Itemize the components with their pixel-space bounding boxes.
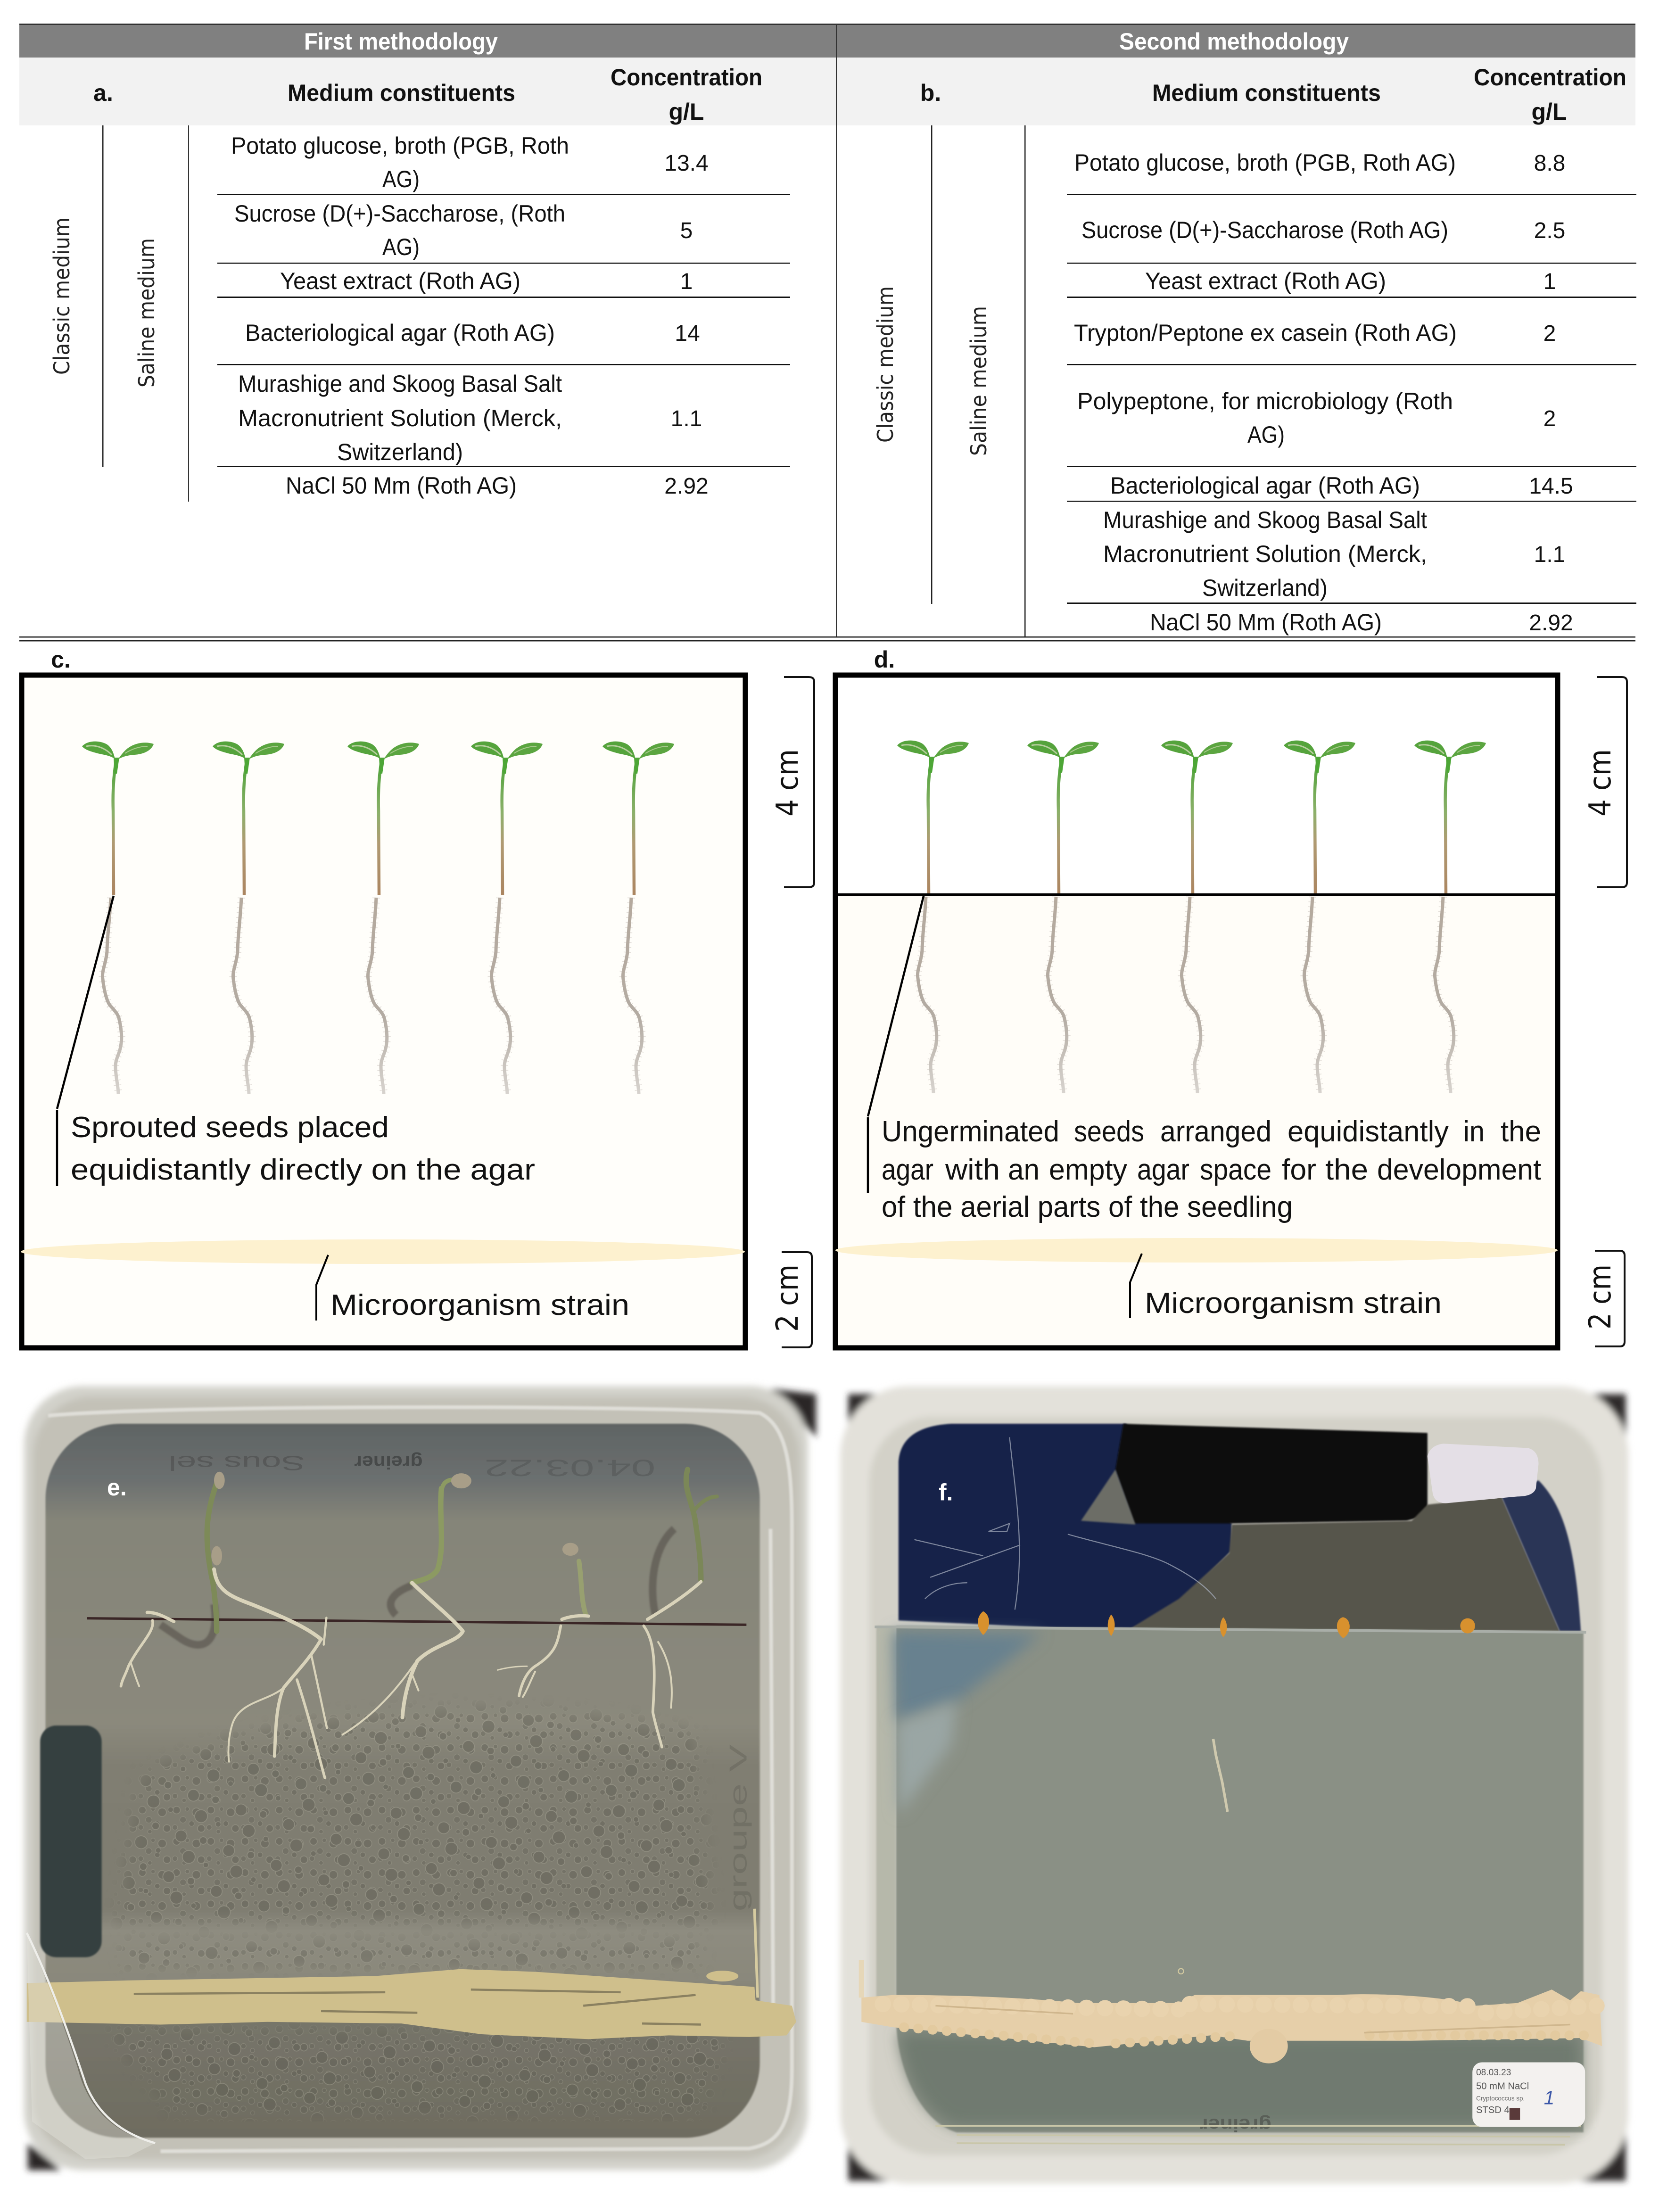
table rows: Murashige and Skoog Basal Salt bbox=[238, 371, 562, 397]
callout: ungerminated seeds: space bbox=[1200, 1154, 1271, 1186]
callout: ungerminated seeds: the bbox=[1501, 1115, 1541, 1148]
embossed and handwritten marks: greiner bbox=[354, 1452, 423, 1472]
blue reflection on agar bbox=[893, 1631, 1041, 1723]
table rows: Polypeptone, for microbiology (Roth bbox=[1077, 388, 1453, 414]
table rows: 14 bbox=[675, 321, 700, 346]
table rows: Sucrose (D(+)-Saccharose, (Roth bbox=[234, 200, 565, 227]
lower dark agar bbox=[899, 2033, 1581, 2127]
callout: ungerminated seeds: empty bbox=[1049, 1154, 1127, 1186]
panel c: first methodology diagram bbox=[21, 646, 814, 1348]
dark upper background: navy bbox=[899, 1424, 1232, 1631]
callout: ungerminated seeds: seeds bbox=[1074, 1115, 1144, 1148]
lower label bbox=[1472, 2062, 1585, 2127]
marking line bbox=[87, 1618, 746, 1625]
table rows: Sucrose (D(+)-Saccharose (Roth AG) bbox=[1081, 217, 1448, 243]
column headers bbox=[19, 58, 836, 125]
column headers: g/L bbox=[669, 99, 704, 125]
dark upper background: black bbox=[1115, 1424, 1428, 1523]
table rows: 1 bbox=[1543, 269, 1556, 294]
upper label bbox=[1428, 1444, 1538, 1503]
label f: f. bbox=[939, 1479, 953, 1505]
plate body bbox=[24, 1386, 816, 2170]
callout: ungerminated seeds: development bbox=[1377, 1154, 1541, 1186]
table rows: Yeast extract (Roth AG) bbox=[1145, 268, 1386, 294]
callout: ungerminated seeds: the bbox=[1325, 1154, 1368, 1186]
plastic film reflection bbox=[27, 1933, 155, 2159]
photo f: second methodology plate bbox=[840, 1386, 1628, 2184]
small ring bbox=[1178, 1969, 1184, 1974]
plate box bbox=[835, 675, 1558, 1348]
table rows: Trypton/Peptone ex casein (Roth AG) bbox=[1074, 320, 1457, 346]
microorganism strain band bbox=[21, 1239, 745, 1264]
vertical labels: classic and saline medium bbox=[873, 125, 1026, 637]
seedling shoots bbox=[207, 1469, 717, 1631]
agar edge bbox=[875, 1627, 1586, 1632]
table rows: Bacteriological agar (Roth AG) bbox=[245, 320, 555, 346]
table rows: 2.92 bbox=[1529, 611, 1573, 636]
dark reflection patch bbox=[40, 1725, 102, 1957]
vertical labels: classic and saline medium: Classic medium bbox=[873, 286, 898, 443]
dark upper background: grey bbox=[1126, 1496, 1560, 1631]
panel: second methodology table bbox=[836, 24, 1636, 637]
rim strip left bbox=[876, 1626, 896, 1997]
table rows: Murashige and Skoog Basal Salt bbox=[1103, 507, 1427, 533]
table rows: 1 bbox=[680, 269, 693, 294]
column headers: Medium constituents bbox=[1152, 80, 1381, 106]
photo e: first methodology plate bbox=[24, 1386, 816, 2170]
embossed and handwritten marks: Sous sel bbox=[169, 1452, 305, 1474]
embossed and handwritten marks bbox=[169, 1452, 752, 1911]
table rows: 1.1 bbox=[671, 406, 702, 431]
callout: sprouted seeds bbox=[57, 896, 535, 1186]
plate body bbox=[840, 1386, 1628, 2184]
column headers: g/L bbox=[1532, 99, 1567, 125]
label e: e. bbox=[107, 1474, 127, 1501]
seedlings bbox=[897, 741, 1486, 1093]
bracket: 2 cm: 2 cm bbox=[1583, 1264, 1618, 1329]
table rows: AG) bbox=[1247, 421, 1285, 448]
header bar: First methodology: First methodology bbox=[304, 28, 498, 55]
seedling shadows bbox=[160, 1529, 674, 1645]
scratches bbox=[915, 1437, 1216, 1609]
callout: sprouted seeds: equidistantly directly on the agar bbox=[71, 1154, 535, 1186]
callout: ungerminated seeds: in bbox=[1463, 1115, 1485, 1148]
header bar: First methodology bbox=[19, 24, 836, 58]
embossed and handwritten marks: groupe V bbox=[725, 1744, 752, 1911]
vertical labels: classic and saline medium: Classic medium bbox=[49, 217, 74, 375]
lower label: 1 bbox=[1544, 2087, 1554, 2109]
bracket: 4 cm: 4 cm bbox=[1583, 749, 1618, 817]
callout: ungerminated seeds: an bbox=[1008, 1154, 1040, 1186]
central seedling bbox=[1213, 1739, 1228, 1812]
table rows: Bacteriological agar (Roth AG) bbox=[1110, 472, 1420, 499]
table rows: 2 bbox=[1543, 406, 1556, 431]
bracket: 2 cm bbox=[770, 1252, 812, 1347]
bracket: 4 cm bbox=[1583, 677, 1627, 887]
lower label: Cryptococcus sp. bbox=[1476, 2095, 1525, 2102]
bracket: 4 cm: 4 cm bbox=[770, 749, 805, 817]
vertical labels: classic and saline medium: Saline medium bbox=[966, 306, 991, 456]
callout: ungerminated seeds: equidistantly bbox=[1288, 1115, 1449, 1148]
table rows: 5 bbox=[680, 218, 693, 243]
callout: ungerminated seeds: arranged bbox=[1160, 1115, 1271, 1148]
callout: ungerminated seeds: of the aerial parts of the seedling bbox=[882, 1191, 1293, 1223]
bracket: 4 cm bbox=[770, 677, 814, 887]
callout: ungerminated seeds: Ungerminated bbox=[882, 1115, 1059, 1148]
plate box bbox=[22, 675, 745, 1348]
callout: microorganism strain: Microorganism strain bbox=[330, 1289, 629, 1321]
table rows: AG) bbox=[382, 166, 420, 192]
callout: ungerminated seeds: for bbox=[1282, 1154, 1316, 1186]
lower label: STSD 4 bbox=[1476, 2105, 1510, 2115]
microorganism streak bbox=[27, 1909, 796, 2039]
condensation droplets bbox=[102, 1691, 733, 2121]
table rows: 2.5 bbox=[1534, 218, 1565, 243]
bottom rim lines bbox=[935, 2126, 1581, 2145]
panel d: second methodology diagram bbox=[835, 646, 1627, 1348]
table rows: NaCl 50 Mm (Roth AG) bbox=[286, 472, 517, 499]
table rows: Switzerland) bbox=[337, 439, 463, 465]
table rows bbox=[217, 132, 790, 499]
label c: c. bbox=[51, 646, 71, 673]
callout: ungerminated seeds: agar bbox=[882, 1154, 933, 1186]
callout: ungerminated seeds: agar bbox=[1137, 1154, 1189, 1186]
vertical labels: classic and saline medium: Saline medium bbox=[134, 238, 159, 388]
lower label: 08.03.23 bbox=[1476, 2068, 1511, 2078]
roots bbox=[121, 1569, 701, 1778]
table rows: 1.1 bbox=[1534, 542, 1565, 567]
vertical labels: classic and saline medium bbox=[49, 125, 189, 502]
column headers: Concentration bbox=[1474, 64, 1626, 91]
table rows: Switzerland) bbox=[1202, 575, 1328, 601]
column headers: b. bbox=[920, 80, 941, 106]
seeds bbox=[978, 1611, 1475, 1638]
microorganism strain band bbox=[835, 1238, 1558, 1263]
column headers: a. bbox=[93, 80, 113, 106]
reflection triangle bbox=[1081, 1469, 1136, 1525]
table rows: Potato glucose, broth (PGB, Roth bbox=[231, 132, 569, 159]
header bar: Second methodology bbox=[836, 24, 1635, 58]
table rows: AG) bbox=[382, 234, 420, 260]
lower label: 50 mM NaCl bbox=[1476, 2081, 1529, 2092]
callout: microorganism strain bbox=[1130, 1254, 1442, 1320]
bracket: 2 cm: 2 cm bbox=[770, 1264, 805, 1332]
callout: ungerminated seeds: with bbox=[945, 1154, 1000, 1186]
callout: microorganism strain: Microorganism strain bbox=[1145, 1287, 1442, 1320]
callout: sprouted seeds: Sprouted seeds placed bbox=[71, 1111, 389, 1144]
agar bbox=[45, 1424, 760, 2138]
table rows: Macronutrient Solution (Merck, bbox=[238, 405, 562, 431]
table rows: 13.4 bbox=[664, 151, 709, 176]
seed heads bbox=[211, 1472, 578, 1566]
table rows: 2 bbox=[1543, 321, 1556, 346]
embossed and handwritten marks: 04.03.22 bbox=[484, 1455, 655, 1481]
table rows: 8.8 bbox=[1534, 151, 1565, 176]
header bar: Second methodology: Second methodology bbox=[1119, 28, 1349, 55]
rim highlights bbox=[48, 1407, 792, 2151]
column headers bbox=[836, 58, 1635, 125]
navy right bbox=[1502, 1480, 1581, 1631]
label d: d. bbox=[874, 646, 895, 673]
table rows bbox=[1067, 149, 1636, 636]
table rows: Macronutrient Solution (Merck, bbox=[1103, 541, 1427, 567]
column headers: Medium constituents bbox=[288, 80, 515, 106]
column headers: Concentration bbox=[611, 64, 762, 91]
panel: first methodology table bbox=[19, 24, 836, 502]
embossed brand: greiner bbox=[1200, 2114, 1271, 2135]
seedlings bbox=[82, 742, 674, 1094]
callout: microorganism strain bbox=[316, 1255, 629, 1321]
table rows: Yeast extract (Roth AG) bbox=[280, 268, 520, 294]
table rows: NaCl 50 Mm (Roth AG) bbox=[1150, 609, 1382, 636]
table rows: 14.5 bbox=[1529, 474, 1573, 499]
microorganism streak bbox=[861, 1960, 1602, 2063]
bracket: 2 cm bbox=[1583, 1251, 1625, 1346]
lower agar bbox=[896, 1626, 1584, 2132]
callout: ungerminated seeds bbox=[868, 894, 1541, 1223]
table rows: Potato glucose, broth (PGB, Roth AG) bbox=[1074, 149, 1456, 176]
table rows: 2.92 bbox=[664, 474, 709, 499]
